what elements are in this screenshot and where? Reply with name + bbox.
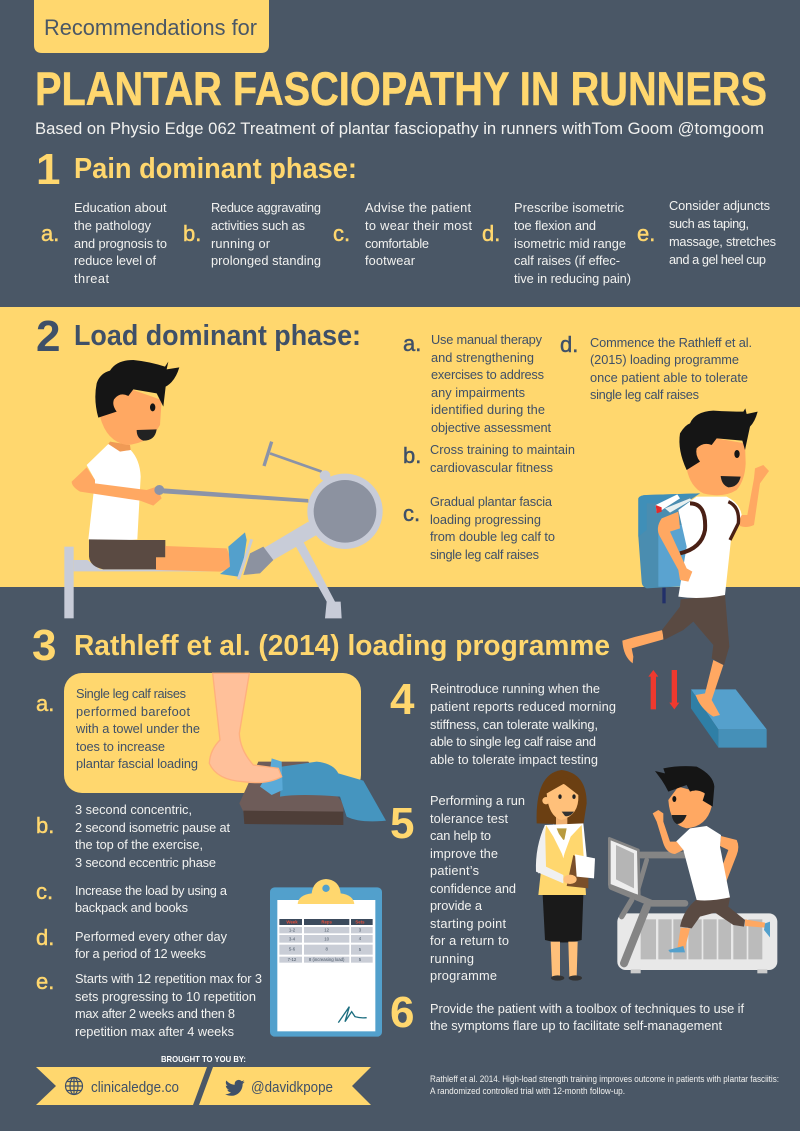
item 1e (637, 198, 776, 267)
item 1d: d. (482, 221, 500, 246)
section 2 heading: Load dominant phase: (74, 320, 361, 352)
item 1a: and prognosis to (74, 236, 167, 251)
item 2a: exercises to address (431, 367, 544, 382)
item 1a: Education about (74, 200, 167, 215)
illustration: clipboard with programme table: 5-6 (289, 946, 296, 951)
item 4: patient reports reduced morning (430, 699, 616, 714)
item 1b: activities such as (211, 218, 305, 233)
item 2d: Commence the Rathleff et al. (590, 335, 752, 350)
item 2c: c. (403, 501, 420, 526)
item 1e: massage, stretches (669, 234, 776, 249)
section 3 heading (32, 621, 610, 670)
item 5: programme (430, 968, 497, 983)
illustration: man on rowing machine (64, 360, 383, 618)
item 3d: for a period of 12 weeks (75, 946, 206, 961)
illustration: clinician and man on treadmill (536, 766, 777, 981)
footer ribbon: twitter (199, 1067, 371, 1105)
item 1c (333, 200, 472, 268)
item 5: Performing a run (430, 793, 525, 808)
item 5: patient’s (430, 863, 479, 878)
section 1 heading: 1 (36, 145, 60, 194)
item 4: 4 (390, 675, 415, 724)
illustration: clipboard with programme table: 3 (359, 928, 362, 933)
footer ribbon: website: clinicaledge.co (91, 1079, 179, 1096)
panel: item 3a with foot illustration: Single leg calf raises (76, 686, 186, 701)
item 2b (403, 442, 575, 475)
item 3c (36, 879, 228, 915)
item 1b: prolonged standing (211, 253, 321, 268)
item 6: Provide the patient with a toolbox of techniques to use if (430, 1001, 744, 1016)
item 5: provide a (430, 898, 483, 913)
item 1d: tive in reducing pain) (514, 271, 631, 286)
item 3b: b. (36, 813, 54, 838)
illustration: clipboard with programme table: 5 (359, 957, 362, 962)
item 3d: Performed every other day (75, 929, 228, 944)
item 1d: isometric mid range (514, 236, 626, 251)
item 5: improve the (430, 846, 498, 861)
footer ribbon: website (36, 1067, 207, 1105)
illustration: clipboard with programme table: 3-4 (289, 937, 296, 942)
illustration: clipboard with programme table: 10 (324, 937, 330, 942)
item 3c: Increase the load by using a (75, 883, 228, 898)
item 2a (403, 331, 551, 435)
item 3e: Starts with 12 repetition max for 3 (75, 971, 262, 986)
item 1b: running or (211, 236, 271, 251)
panel: item 3a with foot illustration: toes to increase (76, 739, 165, 754)
item 3b: 3 second eccentric phase (75, 855, 216, 870)
section 1 heading (36, 145, 357, 194)
illustration: clipboard with programme table: 7-12 (288, 957, 297, 962)
item 3b: 2 second isometric pause at (75, 820, 230, 835)
panel: load dominant phase band (0, 307, 800, 587)
item 2d: (2015) loading programme (590, 352, 739, 367)
item 1d: Prescribe isometric (514, 200, 625, 215)
panel: item 3a with foot illustration: a. (36, 691, 54, 716)
item 5: tolerance test (430, 811, 508, 826)
illustration: clipboard with programme table: Reps (321, 920, 333, 925)
item 1c: footwear (365, 253, 416, 268)
item 4: able to tolerate impact testing (430, 752, 598, 767)
item 1b (183, 200, 321, 268)
illustration: clipboard with programme table: 12 (324, 928, 330, 933)
item 2b: cardiovascular fitness (430, 460, 553, 475)
item 5: can help to (430, 828, 491, 843)
item 2a: any impairments (431, 385, 525, 400)
item 1b: b. (183, 221, 201, 246)
item 2a: Use manual therapy (431, 332, 543, 347)
illustration: clipboard with programme table: 8 (increasing load) (309, 957, 345, 962)
item 2b: b. (403, 443, 421, 468)
item 4: able to single leg calf raise and (430, 734, 596, 749)
item 5 (390, 793, 525, 983)
panel: item 3a with foot illustration (36, 673, 386, 825)
item 2d (560, 332, 752, 402)
item 2a: and strengthening (431, 350, 534, 365)
item 2d: once patient able to tolerate (590, 370, 748, 385)
item 5: running (430, 951, 474, 966)
item 2b: Cross training to maintain (430, 442, 575, 457)
illustration: clipboard with programme table: 1-2 (289, 928, 296, 933)
item 1a: reduce level of (74, 253, 156, 268)
illustration: foot on towel and box (209, 673, 386, 825)
item 1e: Consider adjuncts (669, 198, 770, 213)
item 1d: toe flexion and (514, 218, 596, 233)
section 3 heading: Rathleff et al. (2014) loading programme (74, 630, 610, 662)
item 1e: such as taping, (669, 216, 749, 231)
item 1d (482, 200, 631, 286)
item 1b: Reduce aggravating (211, 200, 321, 215)
item 1a: the pathology (74, 218, 152, 233)
panel: section 1 items (41, 198, 776, 286)
subtitle: Based on Physio Edge 062 Treatment of plantar fasciopathy in runners withTom Goom @tomgoom (35, 119, 764, 138)
panel: item 3a with foot illustration: performed barefoot (76, 704, 190, 719)
item 2c: loading progressing (430, 512, 541, 527)
item 6: 6 (390, 988, 414, 1037)
item 2c (403, 494, 555, 562)
item 4 (390, 675, 616, 767)
item 5: confidence and (430, 881, 516, 896)
item 5: for a return to (430, 933, 509, 948)
section 2 heading: 2 (36, 312, 60, 361)
item 1e: and a gel heel cup (669, 252, 766, 267)
item 2d: single leg calf raises (590, 387, 699, 402)
item 4: Reintroduce running when the (430, 681, 600, 696)
item 3c: backpack and books (75, 900, 188, 915)
item 5: starting point (430, 916, 506, 931)
item 3d (36, 925, 228, 961)
item 1a: threat (74, 271, 109, 286)
item 3d: d. (36, 925, 54, 950)
item 3b: 3 second concentric, (75, 802, 192, 817)
item 3e: e. (36, 969, 54, 994)
item 1c: Advise the patient (365, 200, 471, 215)
item 3e: repetition max after 4 weeks (75, 1024, 234, 1039)
icon: globe (66, 1078, 82, 1094)
reference citation: A randomized controlled trial with 12-month follow-up. (430, 1086, 625, 1096)
item 3c: c. (36, 879, 53, 904)
item 4: stiffness, can tolerate walking, (430, 717, 598, 732)
footer ribbon: twitter: @davidkpope (251, 1079, 333, 1096)
item 2c: from double leg calf to (430, 529, 555, 544)
illustration: clipboard with programme table: 5 (359, 947, 362, 952)
item 2c: Gradual plantar fascia (430, 494, 553, 509)
item 5: 5 (390, 799, 414, 848)
illustration: runner with backpack on step (622, 408, 769, 748)
footer: brought to you by: BROUGHT TO YOU BY: (161, 1054, 246, 1064)
panel: item 3a with foot illustration: plantar fascial loading (76, 756, 198, 771)
panel: item 3a with foot illustration: with a towel under the (75, 721, 200, 736)
item 1a (41, 200, 167, 286)
item 2c: single leg calf raises (430, 547, 539, 562)
illustration: clipboard with programme table: Sets (355, 920, 365, 925)
illustration: clipboard with programme table: 8 (325, 946, 328, 951)
item 3e: sets progressing to 10 repetition (75, 989, 256, 1004)
item 2a: identified during the (431, 402, 545, 417)
item 1c: comfortable (365, 236, 429, 251)
item 3b: the top of the exercise, (75, 837, 203, 852)
illustration: clipboard with programme table: 4 (359, 936, 362, 941)
item 2d: d. (560, 332, 578, 357)
header tab (34, 0, 269, 53)
item 1a: a. (41, 221, 59, 246)
section 1 heading: Pain dominant phase: (74, 153, 357, 185)
item 1c: c. (333, 221, 350, 246)
icon: twitter bird (225, 1080, 245, 1096)
section 2 heading (36, 312, 361, 361)
illustration: clipboard with programme table: Week (286, 920, 298, 925)
header tab: Recommendations for (44, 15, 257, 40)
item 1e: e. (637, 221, 655, 246)
item 3e (36, 969, 262, 1039)
item 1d: calf raises (if effec- (514, 253, 620, 268)
section 3 heading: 3 (32, 621, 56, 670)
item 2a: objective assessment (431, 420, 551, 435)
item 3b (36, 802, 230, 870)
panel: section 2 items (403, 331, 752, 562)
item 6: the symptoms flare up to facilitate self-management (430, 1018, 722, 1033)
item 6 (390, 988, 744, 1037)
illustration: clipboard with programme table (270, 879, 382, 1037)
item 1c: to wear their most (365, 218, 472, 233)
reference citation (430, 1074, 779, 1096)
item 2a: a. (403, 331, 421, 356)
item 3e: max after 2 weeks and then 8 (75, 1006, 235, 1021)
